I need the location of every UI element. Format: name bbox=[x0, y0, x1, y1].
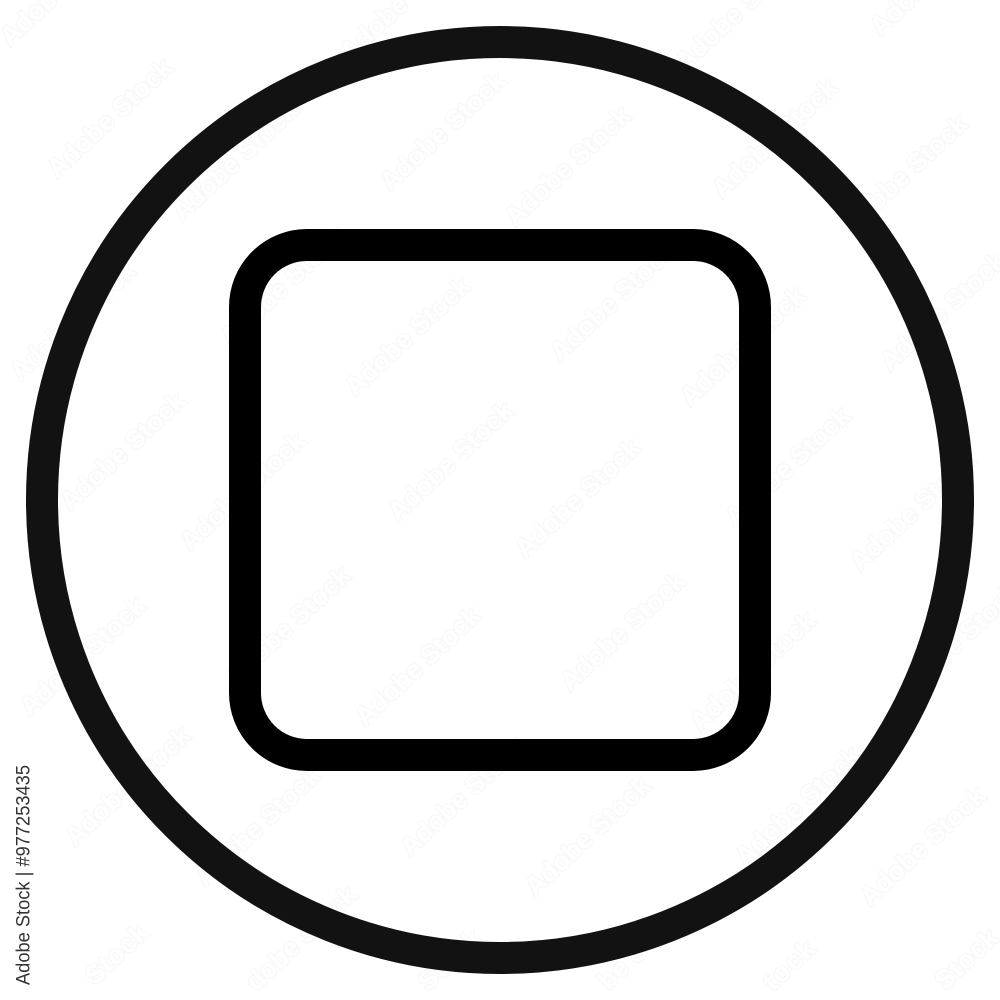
watermark: repeated diagonal pattern: Adobe Stock bbox=[394, 730, 531, 861]
watermark: repeated diagonal pattern: Stock bbox=[79, 917, 154, 990]
watermark: repeated diagonal pattern: Adobe Stock bbox=[684, 605, 821, 736]
icon: rounded stop square bbox=[245, 245, 755, 755]
watermark: repeated diagonal pattern: Adobe Stock bbox=[41, 52, 178, 183]
watermark: repeated diagonal pattern: Adobe Stock bbox=[214, 220, 351, 351]
watermark: repeated diagonal pattern: Adobe Stock bbox=[719, 400, 856, 531]
watermark: repeated diagonal pattern: Adobe Stock bbox=[382, 395, 519, 526]
watermark: repeated diagonal pattern: Adobe Stock bbox=[499, 100, 636, 231]
watermark: repeated diagonal pattern: Stock bbox=[412, 923, 487, 996]
watermark: repeated diagonal pattern: Adobe Stock bbox=[174, 425, 311, 556]
watermark: repeated diagonal pattern: Adobe Stock bbox=[349, 600, 486, 731]
watermark: repeated diagonal pattern: be Stock bbox=[592, 897, 694, 995]
watermark: repeated diagonal pattern: tock bbox=[757, 933, 821, 996]
watermark: repeated diagonal pattern: Adobe Stock bbox=[219, 560, 356, 691]
watermark: repeated diagonal pattern: Adobe Stock bbox=[554, 565, 691, 696]
watermark: repeated diagonal pattern: dobe Stock bbox=[240, 879, 363, 996]
watermark: repeated diagonal pattern: Adobe Stock bbox=[544, 235, 681, 366]
watermark: repeated diagonal pattern: Adobe Stock bbox=[339, 270, 476, 401]
watermark: repeated diagonal pattern: Adobe Stock bbox=[854, 780, 991, 911]
watermark: repeated diagonal pattern: Adobe Stock bbox=[14, 590, 151, 721]
watermark: repeated diagonal pattern: Adobe Stock bbox=[674, 280, 811, 411]
watermark: repeated diagonal pattern: Adobe Stock bbox=[189, 760, 326, 891]
watermark: repeated diagonal pattern: Adobe Stock bbox=[729, 740, 866, 871]
attribution: stock image number: Adobe Stock | #977253435 bbox=[14, 765, 34, 985]
watermark: repeated diagonal pattern: Adobe Stock bbox=[4, 255, 141, 386]
watermark: repeated diagonal pattern: Adobe Stock bbox=[59, 720, 196, 851]
watermark: repeated diagonal pattern: Adobe Stock bbox=[706, 72, 843, 203]
watermark: repeated diagonal pattern: Adobe Stock bbox=[374, 65, 511, 196]
watermark: repeated diagonal pattern: Adobe Stock bbox=[509, 432, 646, 563]
watermark: repeated diagonal pattern: Adobe Stock bbox=[166, 95, 303, 226]
watermark: repeated diagonal pattern: Adobe Stock bbox=[836, 108, 973, 239]
watermark: repeated diagonal pattern: Adobe Stock bbox=[54, 385, 191, 516]
watermark: repeated diagonal pattern: Adobe Stock bbox=[844, 445, 981, 576]
watermark: repeated diagonal pattern: Adobe Stock bbox=[519, 770, 656, 901]
